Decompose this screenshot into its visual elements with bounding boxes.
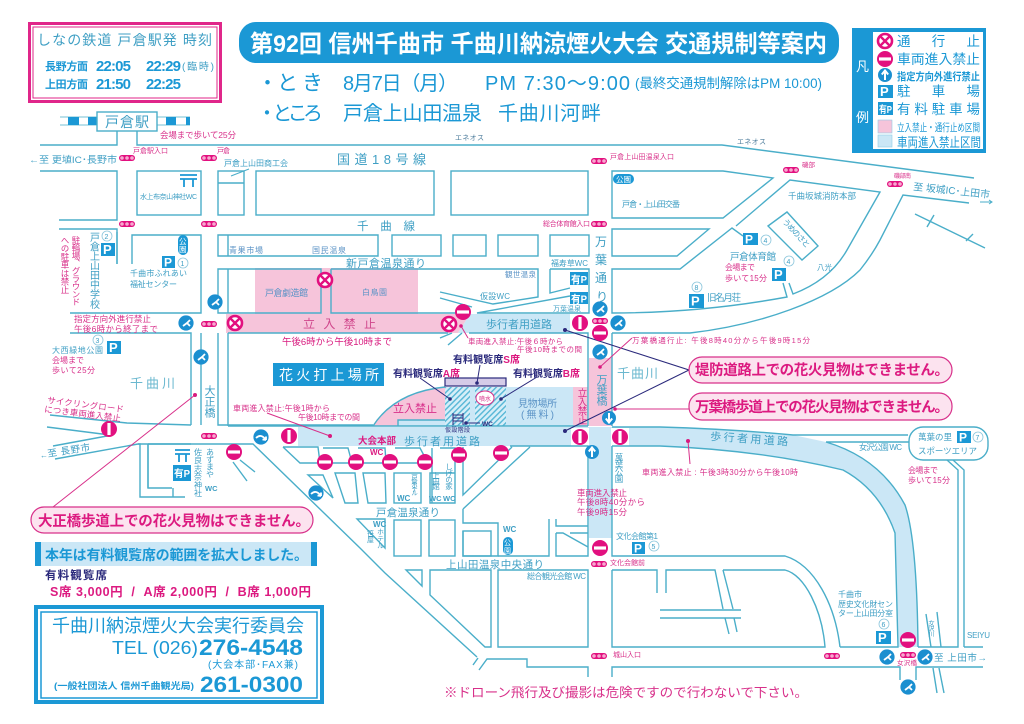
map labels: south side: ター上山田分室 bbox=[838, 608, 893, 618]
event area labels: 午後10時までの間 bbox=[517, 344, 582, 354]
map labels: north side: 磯部 bbox=[802, 160, 816, 169]
paid seat prices: S席 3,000円 / A席 2,000円 / B席 1,000円 bbox=[50, 584, 311, 599]
parking signs: 6 bbox=[882, 622, 886, 629]
event area labels: WC bbox=[370, 448, 384, 457]
panel: timetable: 21:50 bbox=[96, 76, 131, 93]
map labels: north side: 国道18号線 bbox=[337, 152, 426, 167]
parking signs: P bbox=[103, 242, 112, 257]
legend: P bbox=[880, 84, 889, 99]
map labels: north side: 戸倉 bbox=[217, 147, 230, 155]
event area labels: 歩行者用道路 bbox=[710, 429, 789, 448]
map labels: west side: への駐車は禁止 bbox=[60, 236, 70, 294]
map labels: south side: 文化会館第1 bbox=[616, 531, 659, 541]
map labels: south side: 午後9時15分 bbox=[577, 507, 627, 517]
event area labels: 千曲川 bbox=[617, 366, 658, 381]
event area labels: 歩行者用道路 bbox=[486, 317, 552, 331]
event area labels: 大会本部 bbox=[358, 435, 396, 447]
panel: timetable: 22:29 bbox=[146, 58, 181, 75]
map labels: west side: につき車両進入禁止 bbox=[44, 404, 122, 423]
map labels: south side: WC bbox=[429, 494, 442, 503]
map labels: west side: 大正橋 bbox=[203, 384, 216, 419]
event date and place: 千曲川河畔 bbox=[498, 102, 601, 125]
map labels: south side: 笹屋 bbox=[366, 529, 374, 544]
event area labels: 車両進入禁止:午後６時から bbox=[468, 336, 563, 346]
map labels: north side: 新戸倉温泉通り bbox=[346, 256, 426, 270]
event area labels: 万葉橋 bbox=[595, 374, 608, 407]
panel: organizing committee: TEL (026) bbox=[112, 638, 198, 658]
parking signs: 園 bbox=[179, 245, 186, 254]
map labels: south side: 戸倉温泉通り bbox=[376, 506, 440, 519]
map labels: south side: 総合観光会館 WC bbox=[527, 571, 586, 581]
map labels: south side: 萬葉公園 bbox=[614, 452, 624, 484]
notice: expanded paid seating bbox=[35, 542, 317, 566]
map labels: north side: 戸倉上山田商工会 bbox=[224, 158, 288, 168]
callout: Manyo bridge: 万葉橋歩道上での花火見物はできません。 bbox=[695, 398, 949, 416]
event area labels: 午後6時から午後10時まで bbox=[282, 336, 392, 348]
map labels: west side: 午後6時から終了まで bbox=[74, 324, 158, 334]
event date and place: 戸倉上山田温泉 bbox=[343, 102, 482, 125]
event area labels: 有料観覧席B席 bbox=[513, 367, 580, 380]
panel: timetable: 22:25 bbox=[146, 76, 181, 93]
event area labels: 仮設階段 bbox=[445, 426, 470, 434]
callout: 萬葉の里 スポーツエリア bbox=[909, 427, 988, 460]
map labels: north side: 会場まで歩いて25分 bbox=[160, 130, 236, 140]
legend: 車両進入禁止区間 bbox=[897, 135, 981, 150]
map labels: north side: 戸倉体育館 bbox=[730, 251, 776, 263]
map labels: south side: 歴史文化財セン bbox=[838, 599, 893, 609]
panel: timetable bbox=[30, 24, 220, 102]
map labels: north side: 仮設WC bbox=[480, 291, 510, 301]
map labels: south side: WC bbox=[503, 525, 517, 534]
panel: timetable: 長野方面 bbox=[45, 59, 88, 73]
panel: timetable: 上田方面 bbox=[45, 77, 88, 91]
map labels: west side: ← bbox=[40, 451, 48, 460]
map labels: north side: 歩いて15分 bbox=[725, 273, 767, 283]
event area labels: 花火打上場所 bbox=[279, 367, 379, 383]
map labels: south side: WC bbox=[397, 494, 411, 503]
map labels: north side: 福寿草WC bbox=[551, 258, 588, 268]
map labels: south side: 上山田温泉中央通り bbox=[446, 558, 544, 571]
legend: 有料駐車場 bbox=[897, 102, 980, 117]
map labels: west side: 至 長野市 bbox=[47, 441, 91, 460]
map labels: south side: ※ドローン飛行及び撮影は危険ですので行わないで下さい。 bbox=[444, 685, 808, 700]
map labels: south side: 午後8時40分から bbox=[577, 497, 645, 507]
panel: timetable: (臨時) bbox=[182, 60, 214, 73]
map labels: north side: 国民温泉 bbox=[312, 245, 346, 255]
map labels: south side: 上田館 bbox=[431, 472, 440, 491]
map area fills bbox=[226, 268, 918, 647]
legend: 凡 bbox=[856, 59, 869, 74]
map labels: north side: 戸倉劇造館 bbox=[265, 287, 308, 298]
legend bbox=[852, 28, 986, 153]
shrine marker and paid parking bbox=[173, 175, 197, 481]
station symbol: 戸倉駅: 戸倉駅 bbox=[105, 114, 149, 130]
event area labels: 有料観覧席A席 bbox=[393, 367, 460, 380]
panel: timetable: しなの鉄道 戸倉駅発 時刻 bbox=[37, 32, 212, 48]
map labels: north side: 白鳥園 bbox=[362, 287, 387, 297]
map labels: west side: 指定方向外進行禁止 bbox=[74, 314, 151, 324]
event area labels: 噴水 bbox=[479, 395, 491, 403]
event area labels: 立入禁止 bbox=[393, 401, 437, 415]
callout: Manyo bridge bbox=[689, 393, 952, 420]
parking signs: 3 bbox=[96, 338, 100, 345]
callout: levee road: 堤防道路上での花火見物はできません。 bbox=[695, 361, 949, 379]
parking signs: 4 bbox=[786, 259, 790, 266]
station symbol: 戸倉駅 bbox=[60, 112, 190, 131]
parking signs: 有P bbox=[571, 273, 587, 286]
map labels: west side: 佐良志奈神社 bbox=[194, 447, 202, 498]
map labels: north side: り bbox=[596, 290, 608, 304]
panel: organizing committee: (大会本部･FAX兼) bbox=[208, 658, 298, 671]
markers: road closed bbox=[228, 273, 456, 331]
map labels: south side: 戸倉ホテル bbox=[410, 474, 418, 496]
map labels: south side: 会場まで bbox=[908, 465, 938, 475]
callout: 萬葉の里 スポーツエリア: 萬葉の里 bbox=[918, 432, 952, 442]
event date and place: ・ところ bbox=[257, 103, 323, 125]
parking signs bbox=[93, 231, 891, 645]
map labels: south side: 歩いて15分 bbox=[908, 475, 950, 485]
event area labels: 歩行者用道路 bbox=[404, 434, 480, 448]
panel: organizing committee: 276-4548 bbox=[199, 635, 303, 660]
title banner: 第92回 信州千曲市 千曲川納涼煙火大会 交通規制等案内 bbox=[250, 31, 827, 58]
map labels: north side: 万葉温泉 bbox=[553, 304, 581, 313]
event area labels: 立入禁止 bbox=[576, 387, 587, 425]
map labels: west side: 千曲川 bbox=[130, 376, 175, 391]
map labels: north side: 戸倉上山田温泉入口 bbox=[610, 152, 674, 161]
legend: 通行止 bbox=[897, 34, 980, 49]
map labels: south side: 女沢川 bbox=[927, 619, 934, 637]
event area labels: 万葉橋通行止: 午後8時40分から午後9時15分 bbox=[632, 335, 810, 345]
panel: timetable: 22:05 bbox=[96, 58, 131, 75]
map labels: south side: SEIYU bbox=[967, 631, 990, 640]
map labels: south side: 車両進入禁止 bbox=[577, 488, 627, 498]
parking signs: 公 bbox=[179, 237, 187, 246]
event date and place bbox=[257, 72, 822, 125]
event area labels: WC bbox=[482, 421, 493, 428]
event area labels: 立 入 禁 止 bbox=[303, 317, 376, 331]
panel: organizing committee: 261-0300 bbox=[200, 672, 303, 697]
callout: Taisho bridge: 大正橋歩道上での花火見物はできません。 bbox=[38, 512, 310, 530]
parking signs: P bbox=[774, 267, 783, 282]
legend: 有P bbox=[879, 103, 892, 116]
map labels: north side: 戸倉駅入口 bbox=[133, 147, 168, 155]
map labels: north side: 至 坂城IC･上田市 bbox=[913, 180, 991, 201]
map labels: west side: WC bbox=[205, 484, 218, 493]
map labels: west side: 歩いて25分 bbox=[52, 365, 95, 375]
map labels: north side: 会場まで bbox=[725, 262, 755, 272]
map labels: north side: 総合体育館入口 bbox=[543, 219, 590, 228]
event date and place: ・と き bbox=[257, 72, 323, 95]
map labels: south side: しげの家 bbox=[444, 463, 454, 491]
legend: 立入禁止・通行止め区間 bbox=[897, 121, 980, 134]
event area labels: 有料観覧席S席 bbox=[453, 353, 520, 366]
callout: 萬葉の里 スポーツエリア: スポーツエリア bbox=[918, 446, 977, 456]
map labels: north side: 旧名月荘 bbox=[707, 292, 741, 304]
callout: 萬葉の里 スポーツエリア: P bbox=[959, 430, 967, 444]
map labels: north side bbox=[29, 130, 992, 313]
map labels: north side: 八光 bbox=[817, 262, 832, 272]
event date and place: (最終交通規制解除はPM 10:00) bbox=[635, 76, 822, 91]
legend: 指定方向外進行禁止 bbox=[897, 70, 980, 83]
map labels: north side: 万 bbox=[595, 235, 607, 249]
map labels: west side: 千曲市ふれあい bbox=[130, 268, 187, 278]
map labels: west side: サイクリングロード bbox=[47, 395, 124, 414]
panel: organizing committee bbox=[36, 607, 322, 702]
map labels: south side: WC bbox=[443, 494, 456, 503]
map labels: north side: ←至 更埴IC･長野市 bbox=[29, 154, 118, 166]
parking signs: P bbox=[745, 232, 753, 246]
event date and place: PM 7:30～9:00 bbox=[485, 73, 630, 95]
map labels: south side: 千曲市 bbox=[838, 589, 862, 599]
map labels: north side: 葉 bbox=[595, 253, 607, 267]
parking signs: P bbox=[164, 256, 172, 270]
parking signs: P bbox=[878, 630, 887, 645]
map labels: west side: 午後10時までの間 bbox=[298, 412, 360, 422]
map labels: south side: WC bbox=[373, 520, 387, 529]
map labels: south side: 園 bbox=[504, 547, 511, 555]
legend: 駐車場 bbox=[897, 84, 980, 99]
map labels: south side bbox=[366, 442, 990, 700]
map labels: north side: 千曲坂城消防本部 bbox=[788, 191, 856, 201]
markers: pedestrian road entry closed bbox=[101, 315, 628, 445]
parking signs: 4 bbox=[764, 238, 768, 245]
parking signs: 2 bbox=[104, 234, 108, 241]
map labels: west side bbox=[40, 232, 360, 498]
legend: 車両進入禁止 bbox=[897, 52, 980, 67]
map labels: west side: 福祉センター bbox=[130, 279, 177, 289]
legend: 例 bbox=[856, 110, 869, 125]
callout: Taisho bridge bbox=[31, 507, 313, 533]
markers: direction arrows bbox=[178, 294, 933, 695]
map labels: north side: うめのさと bbox=[781, 217, 812, 250]
paid seat prices: 有料観覧席 bbox=[45, 568, 108, 582]
map labels: west side: 車両進入禁止:午後1時から bbox=[233, 403, 330, 413]
event area labels bbox=[273, 317, 810, 457]
callout: 萬葉の里 スポーツエリア: 7 bbox=[976, 435, 980, 442]
map labels: west side: 会場まで bbox=[52, 355, 84, 365]
road network lines bbox=[40, 131, 985, 693]
map labels: north side: エネオス bbox=[737, 138, 766, 146]
callout: levee road bbox=[689, 357, 952, 383]
map labels: north side: 磯部南 bbox=[894, 172, 911, 180]
map labels: south side: ホテル bbox=[376, 528, 384, 549]
event area labels: 見物場所 bbox=[518, 397, 557, 410]
panel: organizing committee: (一般社団法人 信州千曲観光局) bbox=[54, 680, 194, 691]
map labels: south side: 女沢公園 WC bbox=[859, 442, 902, 452]
panel: organizing committee: 千曲川納涼煙火大会実行委員会 bbox=[52, 616, 304, 636]
event date and place: 8月7日（月） bbox=[343, 72, 458, 95]
map labels: north side: 千曲線 bbox=[357, 220, 416, 233]
parking signs: P bbox=[691, 294, 700, 308]
event area labels: (無料) bbox=[521, 408, 554, 421]
parking signs: 有P bbox=[571, 292, 587, 306]
map labels: west side: 駐輪場、グラウンド bbox=[71, 235, 81, 306]
parking signs: 8 bbox=[694, 285, 698, 292]
markers: no vehicle entry bbox=[226, 304, 916, 648]
markers: three-dot checkpoints bbox=[119, 155, 916, 659]
map labels: north side: 公園 bbox=[616, 175, 631, 184]
parking signs: P bbox=[109, 340, 118, 355]
map labels: south side: 城山入口 bbox=[613, 651, 641, 659]
notice: expanded paid seating: 本年は有料観覧席の範囲を拡大しました。 bbox=[45, 547, 308, 563]
map labels: north side: エネオス bbox=[455, 134, 484, 142]
map labels: north side: 観世温泉 bbox=[505, 269, 536, 279]
map labels: north side: 通 bbox=[595, 271, 607, 285]
map labels: south side: 至 上田市→ bbox=[934, 652, 987, 664]
parking signs: 1 bbox=[180, 261, 184, 268]
parking signs: P bbox=[634, 542, 642, 556]
map labels: north side: 戸倉・上山田交番 bbox=[622, 199, 680, 209]
map labels: north side: 青果市場 bbox=[229, 245, 263, 255]
map labels: south side: 車両進入禁止 : 午後3時30分から午後10時 bbox=[642, 467, 798, 477]
map labels: south side: 文化会館前 bbox=[610, 558, 645, 567]
map labels: south side: 女沢橋 bbox=[897, 658, 918, 667]
map labels: west side: 大西緑地公園 bbox=[52, 345, 103, 355]
map labels: west side: 戸倉上山田中学校 bbox=[88, 232, 100, 310]
shrine marker and paid parking: 有P bbox=[174, 467, 190, 480]
parking signs: 5 bbox=[652, 544, 656, 551]
map labels: north side: 水上布奈山神社WC bbox=[140, 192, 197, 201]
map labels: south side: 公 bbox=[504, 539, 511, 547]
paid seat prices bbox=[45, 568, 311, 599]
title banner bbox=[239, 22, 839, 63]
map labels: west side: あずまや bbox=[206, 448, 214, 478]
leader lines bbox=[53, 324, 690, 507]
